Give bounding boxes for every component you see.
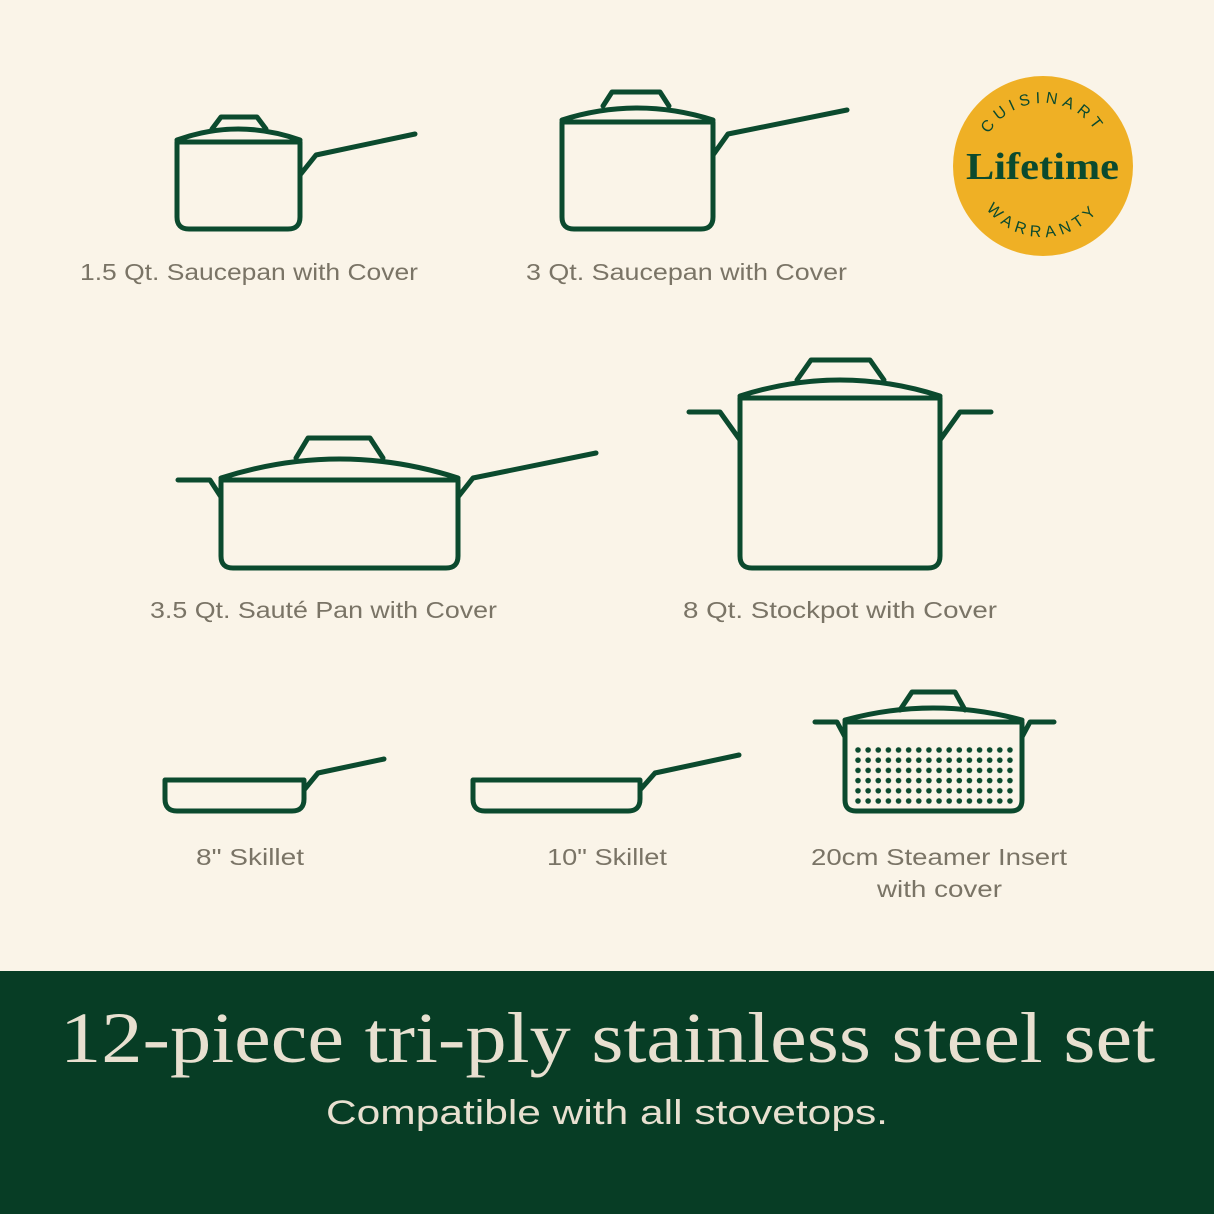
icon: 1.5 qt saucepan [177,117,415,229]
icon: 10 inch skillet [473,755,739,811]
icon: 3 qt saucepan [562,92,847,229]
icon: 8 inch skillet [165,759,384,811]
icon: steamer insert [815,692,1054,811]
icon: stockpot [689,360,991,568]
badge: lifetime warranty: WARRANTY [988,202,1094,238]
bottom band [0,971,1214,1214]
labels: 1.5 Qt. Saucepan with Cover [80,259,418,285]
badge: lifetime warranty [953,76,1133,256]
labels: 8" Skillet [196,844,305,870]
labels: 10" Skillet [547,844,668,870]
icon: saute pan [178,438,596,568]
labels: with cover [876,876,1002,902]
labels: 8 Qt. Stockpot with Cover [683,597,997,623]
labels: 3 Qt. Saucepan with Cover [526,259,847,285]
labels: 3.5 Qt. Sauté Pan with Cover [150,597,497,623]
bottom band: Compatible with all stovetops. [326,1094,888,1132]
badge: lifetime warranty: Lifetime [966,146,1119,188]
badge: lifetime warranty: CUISINART [982,92,1104,132]
labels: 20cm Steamer Insert [811,844,1068,870]
labels [80,259,1068,902]
bottom band: 12-piece tri-ply stainless steel set [60,998,1155,1078]
